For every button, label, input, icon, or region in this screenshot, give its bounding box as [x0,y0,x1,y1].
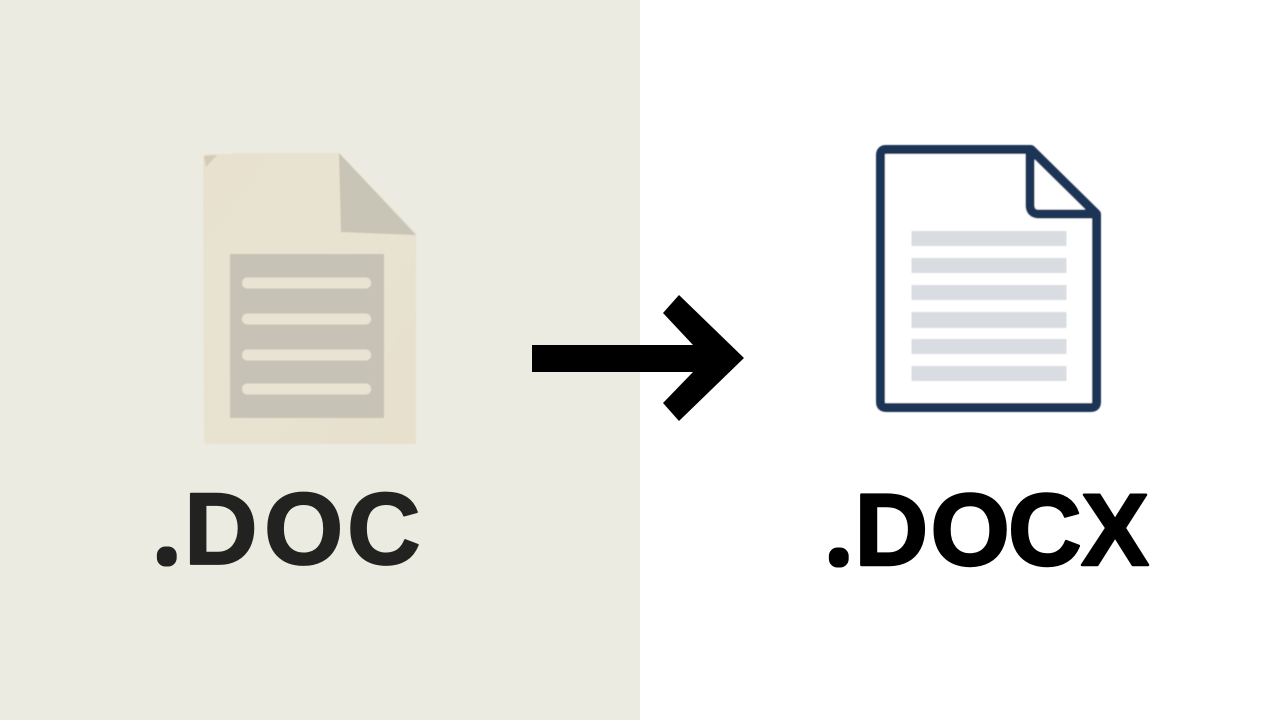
folded corner [339,153,416,235]
panel: new format background [640,0,1280,720]
arrow [532,295,744,421]
label: .DOCX: X [1081,473,1149,587]
text lines [242,278,371,394]
worn corner [204,155,217,167]
panel: old format background [0,0,640,720]
text lines [912,231,1066,381]
label: .DOCX: C [1008,473,1082,587]
document outline [880,150,1096,408]
label: .DOC: . [164,541,170,563]
label: .DOCX: O [930,473,1010,587]
grey content block [230,254,384,418]
icon: aged .doc file [203,153,416,444]
label: .DOC: O [264,472,343,586]
label: .DOC: D [184,472,258,586]
label: .DOCX: . [836,542,842,564]
aged paper sheet [203,153,416,444]
label: .DOCX: D [854,473,928,587]
folded corner [1030,149,1097,214]
label: .DOC: C [347,472,421,586]
icon: modern .docx file [880,149,1097,408]
